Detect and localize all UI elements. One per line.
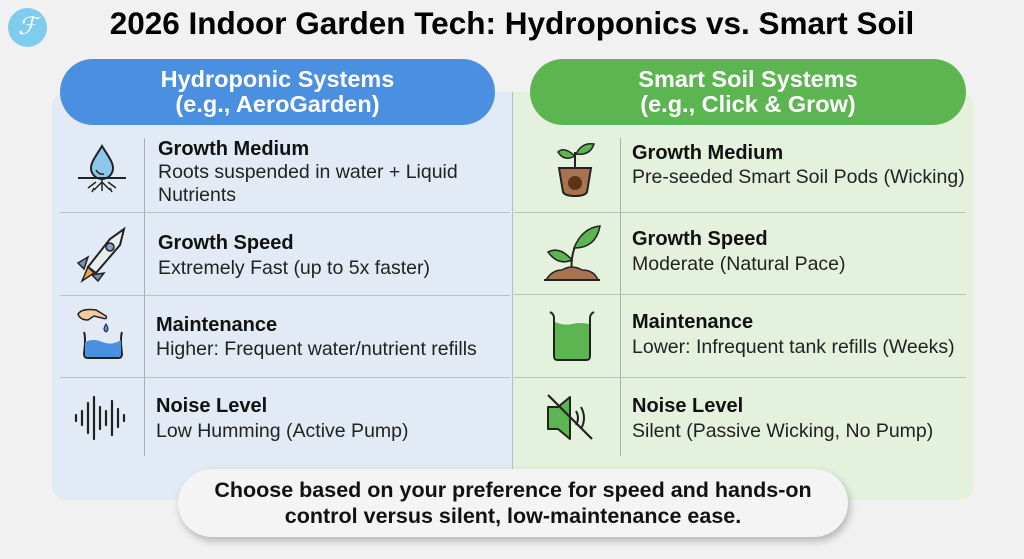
row: soil growth medium: Pre-seeded Smart Soil Pods (Wicking) [632, 166, 965, 188]
logo: ℱ [18, 14, 37, 40]
header: smart soil: Smart Soil Systems [638, 66, 858, 92]
icon: hand water basin [77, 308, 123, 359]
text: Growth Medium [158, 138, 309, 160]
row: hydro growth speed [76, 226, 430, 283]
dividers [60, 212, 510, 213]
row: soil maintenance [550, 311, 955, 361]
row: hydro growth medium [78, 138, 458, 206]
row: hydro maintenance [77, 308, 477, 360]
callout [178, 469, 848, 537]
icon: tank [550, 311, 594, 361]
title: 2026 Indoor Garden Tech: Hydroponics vs. Smart Soil [110, 5, 914, 41]
row: soil maintenance: Lower: Infrequent tank refills (Weeks) [632, 336, 955, 358]
row: hydro noise [74, 395, 408, 442]
icon: sprout [544, 225, 601, 281]
text: Growth Speed [632, 228, 768, 250]
icon: seed pod [557, 143, 595, 197]
row: soil growth speed: Moderate (Natural Pace) [632, 253, 846, 275]
row: soil noise [547, 394, 933, 442]
row: soil growth medium [557, 142, 965, 197]
panel: smart soil [512, 92, 974, 500]
text: Maintenance [156, 314, 277, 336]
header: hydroponic [60, 59, 495, 125]
text: Growth Medium [632, 142, 783, 164]
row: hydro growth medium: Roots suspended in water + Liquid [158, 161, 458, 183]
header: smart soil [530, 59, 966, 125]
icon: sound wave [74, 396, 126, 440]
callout: Choose based on your preference for speed and hands-on [214, 478, 812, 502]
header: hydroponic: (e.g., AeroGarden) [175, 91, 380, 117]
row: hydro maintenance: Higher: Frequent water/nutrient refills [156, 338, 477, 360]
text: Noise Level [156, 395, 267, 417]
header: smart soil: (e.g., Click & Grow) [640, 91, 856, 117]
row: hydro noise: Low Humming (Active Pump) [156, 420, 408, 442]
text: Noise Level [632, 395, 743, 417]
header: hydroponic: Hydroponic Systems [161, 66, 394, 92]
icon: muted speaker [547, 394, 593, 440]
icon: rocket [76, 226, 126, 283]
row: soil noise: Silent (Passive Wicking, No Pump) [632, 420, 933, 442]
row: hydro growth medium: Nutrients [158, 184, 236, 206]
callout: control versus silent, low-maintenance ease. [285, 504, 741, 528]
icon: water drop roots [78, 144, 126, 192]
panel: hydroponic [52, 92, 514, 500]
row: soil growth speed [544, 225, 846, 281]
text: Maintenance [632, 311, 753, 333]
text: Growth Speed [158, 232, 294, 254]
row: hydro growth speed: Extremely Fast (up to 5x faster) [158, 257, 430, 279]
logo [8, 8, 47, 47]
